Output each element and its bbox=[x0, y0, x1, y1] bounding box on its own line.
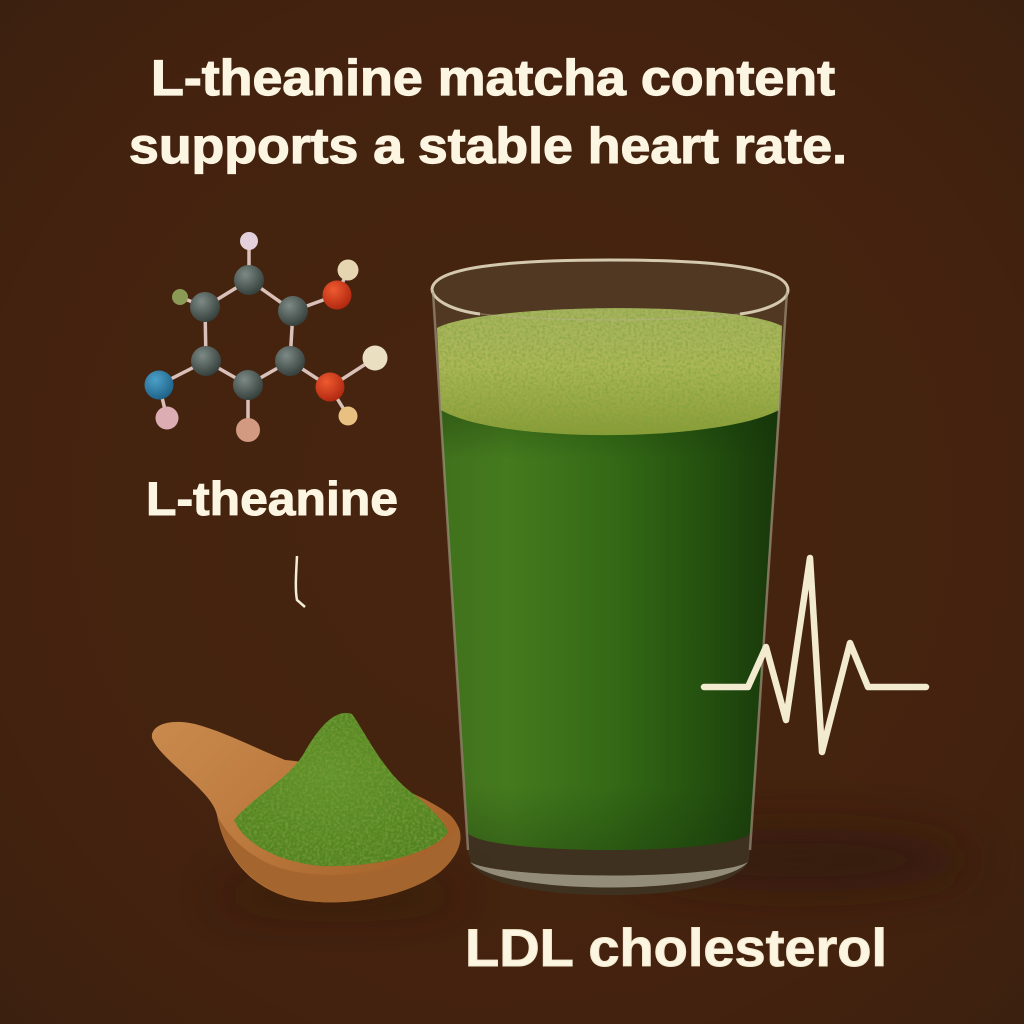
glass shadow bbox=[630, 828, 970, 892]
title bbox=[129, 50, 847, 174]
foam layer bbox=[437, 308, 782, 435]
matcha liquid bbox=[440, 405, 778, 854]
icon: wooden spoon with matcha powder bbox=[152, 713, 461, 902]
icon: L-theanine molecule bbox=[144, 232, 388, 442]
title: L-theanine matcha content bbox=[151, 50, 835, 106]
title: supports a stable heart rate. bbox=[129, 118, 847, 174]
label: LDL cholesterol: LDL cholesterol bbox=[465, 919, 887, 978]
small pointer line bbox=[296, 556, 305, 607]
spoon bbox=[152, 722, 460, 902]
spoon shadow bbox=[215, 881, 465, 909]
glass body bbox=[432, 260, 788, 895]
label: L-theanine: L-theanine bbox=[146, 472, 398, 525]
icon: glass of matcha bbox=[432, 260, 788, 895]
icon: heartbeat line bbox=[704, 558, 926, 752]
glass base bbox=[467, 832, 751, 895]
powder bbox=[234, 713, 448, 866]
glass rim bbox=[432, 260, 788, 314]
